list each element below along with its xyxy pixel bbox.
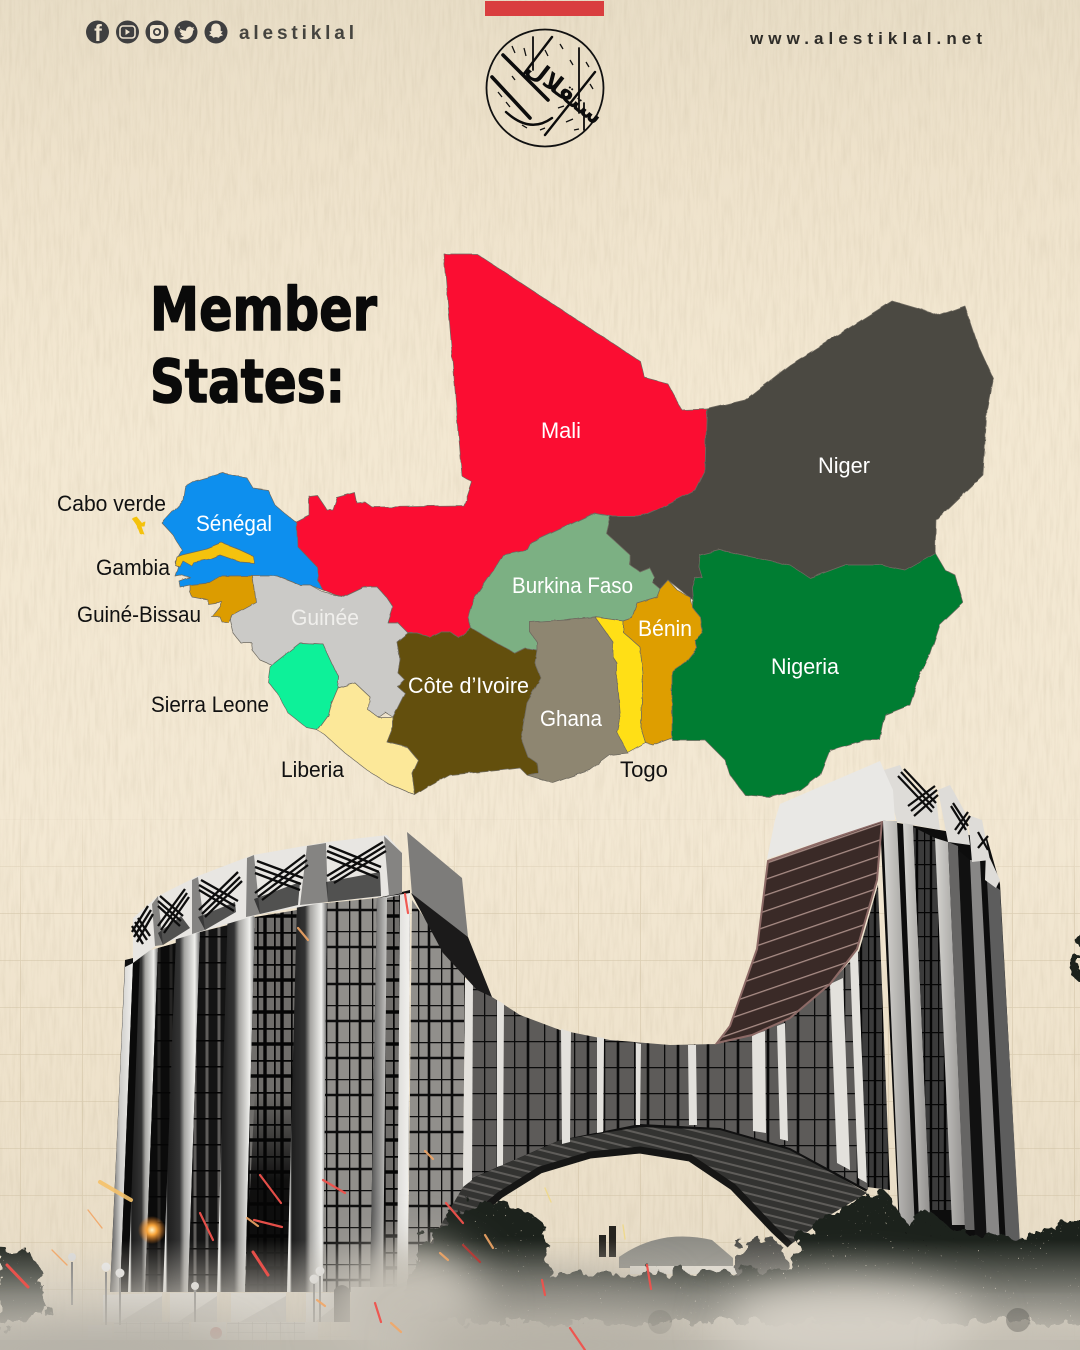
map labels: [57, 418, 870, 782]
sparks: [7, 894, 651, 1350]
trees: [0, 932, 1080, 1330]
bridge glass span: [468, 885, 890, 1190]
label: Nigeria: Nigeria: [771, 654, 840, 679]
label: Gambia: Gambia: [96, 555, 171, 580]
icon: facebook: [86, 20, 109, 46]
street lamps and podium: [68, 1253, 430, 1350]
right tower crown: [884, 765, 1000, 888]
Sierra Leone: [268, 643, 339, 730]
glow: [138, 1216, 166, 1244]
Niger: [606, 301, 993, 600]
Guiné-Bissau: [190, 576, 256, 622]
left tower: [110, 832, 492, 1292]
right tower: [717, 761, 1020, 1250]
icon: instagram: [146, 20, 168, 44]
red top bar: [485, 1, 604, 16]
icon: snapchat: [204, 20, 228, 44]
label: Niger: Niger: [818, 453, 870, 478]
Togo: [595, 617, 646, 753]
Bénin: [623, 580, 702, 745]
Nigeria: [672, 550, 963, 797]
Côte d'Ivoire: [387, 628, 541, 795]
building photograph: [68, 761, 1020, 1350]
website url: www.alestiklal.net: [749, 29, 982, 48]
Mali: [295, 254, 707, 638]
tower roof wing: [407, 832, 468, 937]
title: States:: [150, 347, 345, 417]
icon: twitter: [174, 20, 198, 44]
label: Burkina Faso: Burkina Faso: [512, 573, 633, 598]
social media bar: [86, 20, 354, 46]
label: Guinée: Guinée: [291, 605, 359, 630]
bridge arch underside: [420, 1124, 867, 1262]
map of member states: [132, 254, 993, 797]
Burkina Faso: [468, 513, 660, 653]
icon: facebook: f: [94, 20, 102, 46]
label: Liberia: Liberia: [281, 757, 345, 782]
label: Togo: Togo: [620, 757, 668, 782]
title: Member: [150, 275, 377, 345]
fog at the base: [0, 1240, 1080, 1350]
Guinée: [230, 576, 408, 717]
title: [150, 275, 377, 417]
label: Sénégal: Sénégal: [196, 511, 272, 536]
label: Bénin: Bénin: [638, 616, 692, 641]
logo: calligraphy roundel: ستقلال: [521, 53, 609, 130]
Ghana: [521, 617, 628, 783]
icon: youtube: [116, 20, 139, 44]
logo: calligraphy roundel: [486, 30, 609, 146]
roof wing with slats: [717, 821, 882, 1043]
Sénégal: [162, 473, 323, 590]
dome and statues in the background: [599, 1226, 750, 1274]
label: Sierra Leone: Sierra Leone: [151, 692, 269, 717]
Cabo Verde islands: [132, 517, 146, 535]
Gambia: [175, 543, 254, 567]
Liberia: [317, 683, 418, 795]
label: Cabo verde: Cabo verde: [57, 491, 166, 516]
crown X motifs: [132, 842, 386, 944]
handle text: alestiklal: [239, 23, 354, 44]
label: Guiné-Bissau: Guiné-Bissau: [77, 602, 201, 627]
label: Côte d'Ivoire: Côte d’Ivoire: [408, 673, 529, 698]
label: Mali: Mali: [541, 418, 581, 443]
label: Ghana: Ghana: [540, 706, 603, 731]
crown band: [133, 835, 402, 963]
